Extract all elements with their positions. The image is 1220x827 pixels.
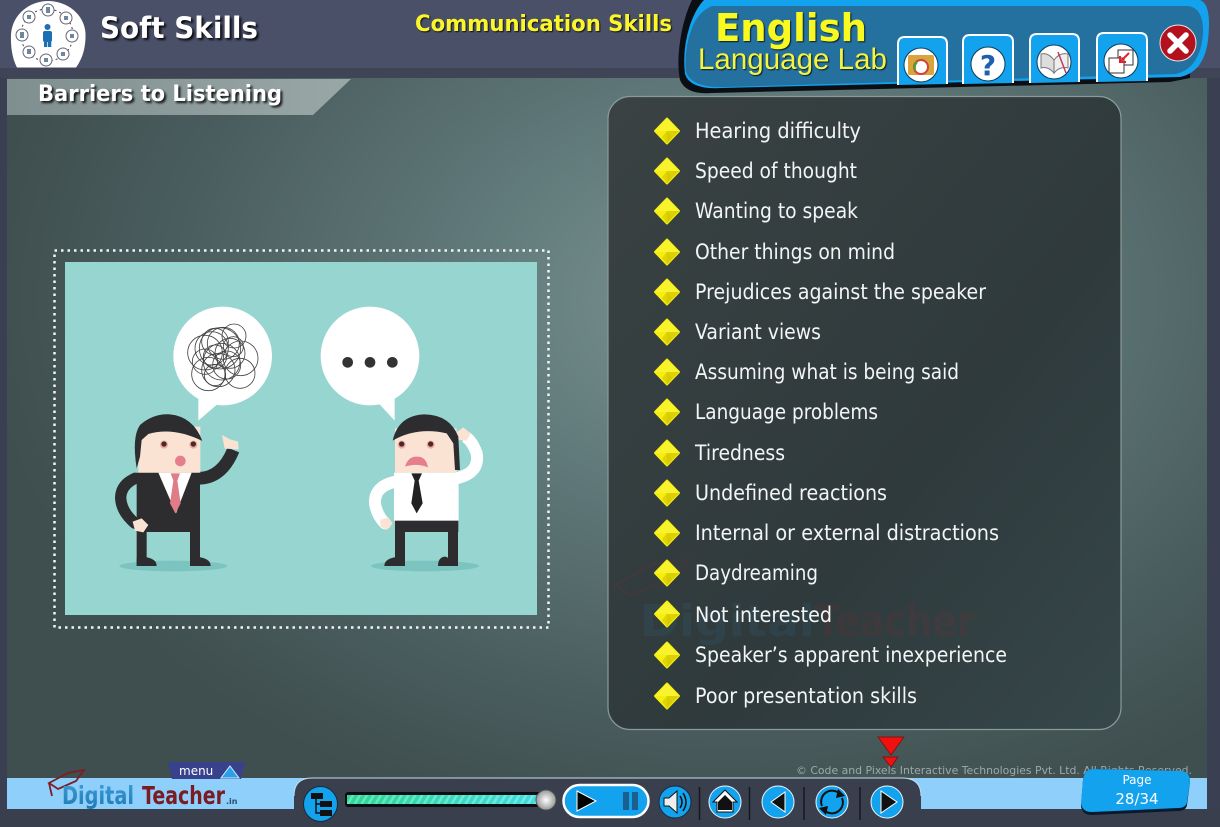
player control bar <box>294 778 921 827</box>
panel: English Language Lab toolbar <box>678 0 1209 93</box>
text: page number: 28/34 <box>1115 790 1159 808</box>
list item: Tiredness <box>655 440 785 466</box>
list item: Prejudices against the speaker: Prejudices against the speaker <box>695 280 986 305</box>
list item: Daydreaming <box>655 560 818 586</box>
list item: Language problems: Language problems <box>695 400 878 425</box>
button: speaker <box>659 786 691 818</box>
page badge <box>1081 769 1190 815</box>
button: book <box>1030 34 1079 83</box>
menu tab <box>168 762 245 779</box>
list item: Not interested: Not interested <box>695 603 832 628</box>
logo: Digital Teacher: Digital <box>62 781 134 810</box>
list item: Hearing difficulty: Hearing difficulty <box>695 119 861 144</box>
button: help <box>963 35 1013 84</box>
picture frame with illustration <box>54 250 548 628</box>
list item: Not interested <box>655 602 832 628</box>
text: English: English <box>715 6 867 50</box>
button: replay <box>816 786 848 818</box>
header lower band <box>0 68 1220 78</box>
watermark: Digital Teacher: Teacher <box>815 596 975 647</box>
copyright text: © Code and Pixels Interactive Technologies Pvt. Ltd. All Rights Reserved. <box>796 764 1192 777</box>
list item: Poor presentation skills: Poor presentation skills <box>695 684 917 709</box>
button: tree menu <box>304 786 338 822</box>
list item: Daydreaming: Daydreaming <box>695 561 818 586</box>
button: resize <box>1097 33 1147 82</box>
logo: Digital Teacher <box>49 770 238 810</box>
list item: Other things on mind: Other things on mind <box>695 240 895 265</box>
text: Language Lab: Language Lab <box>698 43 887 76</box>
heading: Communication Skills: Communication Skills <box>415 12 672 37</box>
button: progress folder <box>898 37 947 85</box>
character: man in white shirt <box>375 414 477 566</box>
banner: Barriers to Listening <box>7 79 351 115</box>
list item: Undefined reactions: Undefined reactions <box>695 481 887 506</box>
logo: soft skills circle <box>11 1 86 68</box>
button: play and pause <box>564 785 648 817</box>
button: next <box>871 786 903 818</box>
progress bar <box>345 790 556 810</box>
list item: Variant views <box>655 320 821 345</box>
illustration: two men talking <box>119 307 479 571</box>
logo: Digital Teacher: .in <box>226 797 238 806</box>
button: close <box>1160 25 1196 61</box>
speech bubble: dots <box>321 307 419 421</box>
banner: Barriers to Listening: Barriers to Listening <box>38 82 282 107</box>
bottom bar: light blue strip <box>7 778 1207 809</box>
arrow: red pointer <box>878 737 904 767</box>
menu tab: menu <box>179 764 213 778</box>
speech bubble: tangled thoughts <box>173 307 272 421</box>
button: home <box>709 786 741 818</box>
header bar <box>0 0 1220 68</box>
button: help: ? <box>980 49 996 82</box>
button: previous <box>762 786 794 818</box>
list item: Variant views: Variant views <box>695 320 821 345</box>
list item: Wanting to speak: Wanting to speak <box>695 199 858 224</box>
panel: barriers list <box>608 96 1121 730</box>
list item: Speaker's apparent inexperience: Speaker’s apparent inexperience <box>695 643 1007 668</box>
character: man in suit <box>121 414 239 566</box>
text: Page: Page <box>1122 773 1152 787</box>
logo: Digital Teacher: Teacher <box>142 781 226 810</box>
watermark: Digital Teacher <box>615 560 975 647</box>
list item: Tiredness: Tiredness <box>694 441 785 466</box>
title: Soft Skills: Soft Skills <box>100 11 258 45</box>
list item: Assuming what is being said: Assuming what is being said <box>695 360 959 385</box>
list item: Internal or external distractions: Internal or external distractions <box>695 521 999 546</box>
watermark: Digital Teacher: Digital <box>640 596 815 647</box>
bottom bar: dark base <box>0 809 1220 827</box>
list item: Speed of thought: Speed of thought <box>695 159 857 184</box>
